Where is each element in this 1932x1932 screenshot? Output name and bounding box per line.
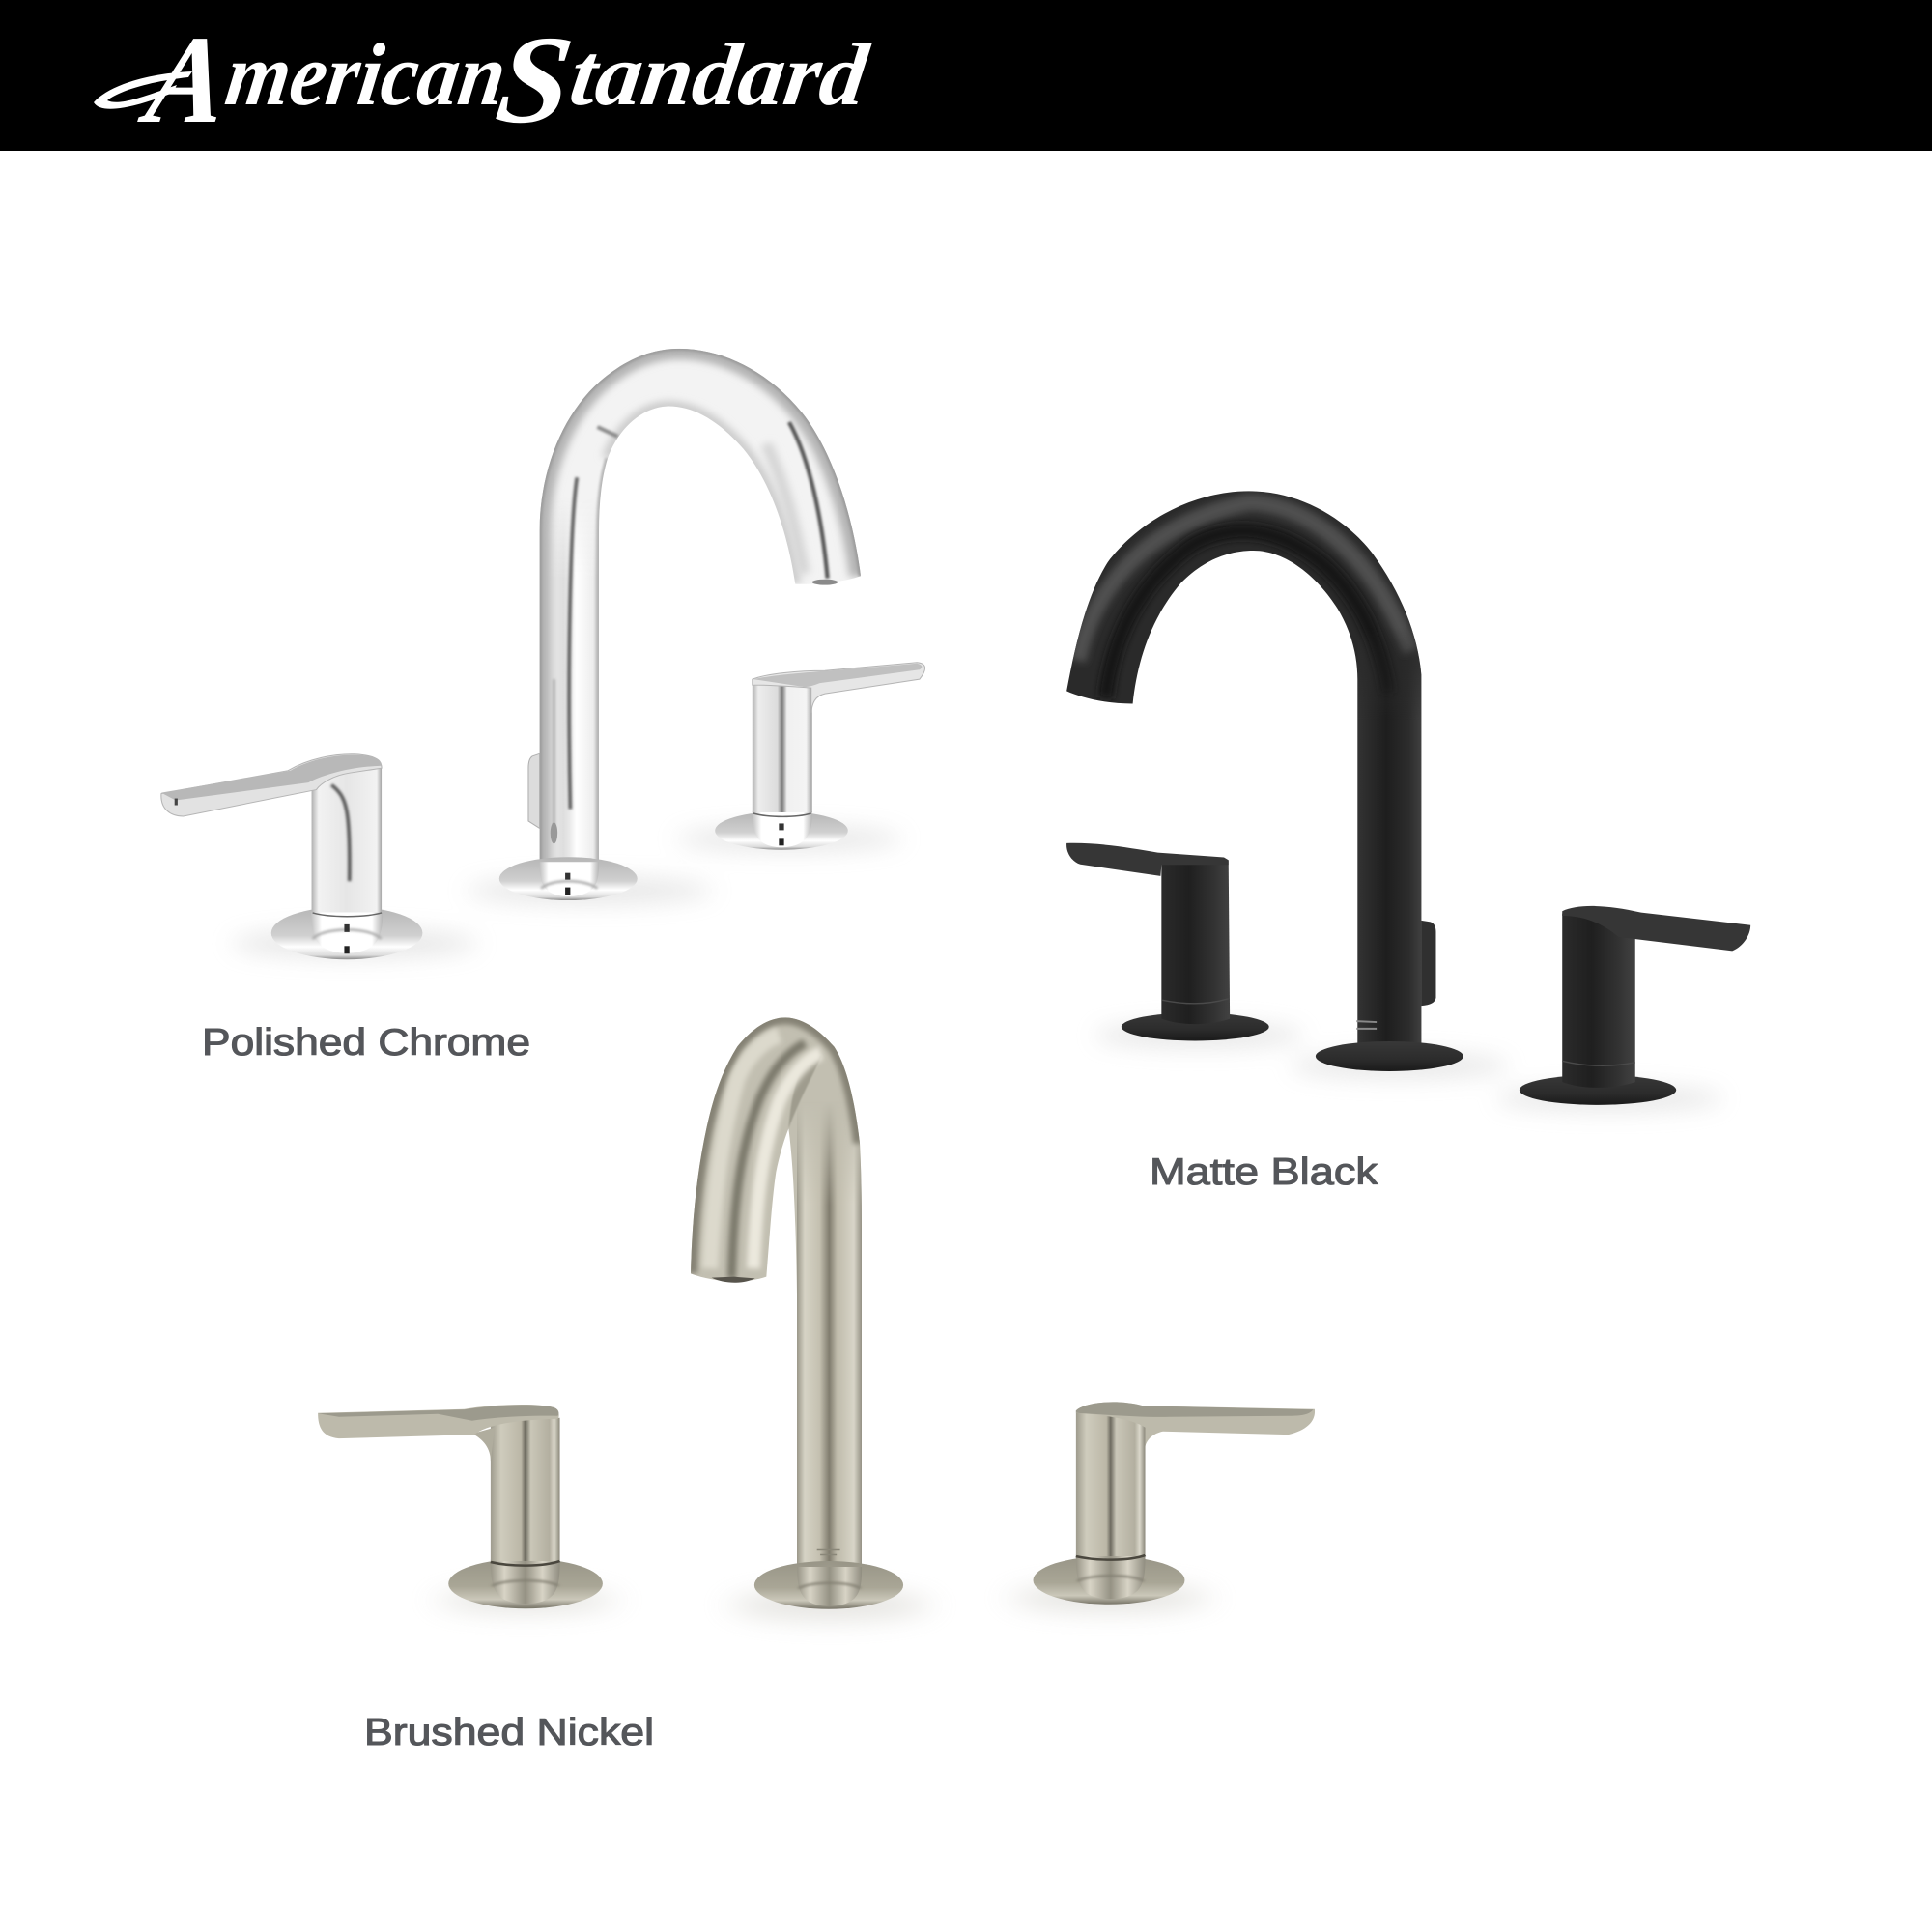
label: Polished Chrome: Polished Chrome	[202, 1022, 530, 1064]
faucet: brushed nickel	[318, 1017, 1315, 1621]
spout	[540, 349, 861, 867]
faucet: matte black	[1066, 491, 1750, 1111]
left handle	[318, 1405, 603, 1608]
label: Brushed Nickel: Brushed Nickel	[364, 1712, 654, 1753]
center base	[754, 1550, 903, 1609]
left handle	[161, 754, 422, 959]
diverter button	[1421, 921, 1435, 1006]
spout	[1066, 491, 1421, 1049]
right handle	[1034, 1402, 1315, 1605]
logo: American Standard wordmark: A	[133, 12, 236, 150]
right handle	[1520, 906, 1750, 1105]
diverter button	[528, 753, 540, 828]
base shadows	[232, 827, 901, 957]
center base	[1316, 1041, 1463, 1071]
base shadows	[438, 1583, 1209, 1621]
base shadows	[1094, 1023, 1723, 1111]
logo: American Standard wordmark: tandard	[565, 25, 875, 124]
logo: American Standard wordmark	[83, 12, 877, 150]
center base	[499, 857, 638, 900]
logo: American Standard wordmark: merican	[220, 25, 512, 124]
left handle	[1066, 843, 1269, 1040]
logo: American Standard wordmark: S	[489, 12, 581, 150]
label: Matte Black: Matte Black	[1150, 1151, 1378, 1193]
header band with brand logo	[0, 0, 1932, 151]
right handle	[715, 663, 925, 850]
spout	[691, 1017, 862, 1575]
faucet: polished chrome	[161, 349, 925, 959]
